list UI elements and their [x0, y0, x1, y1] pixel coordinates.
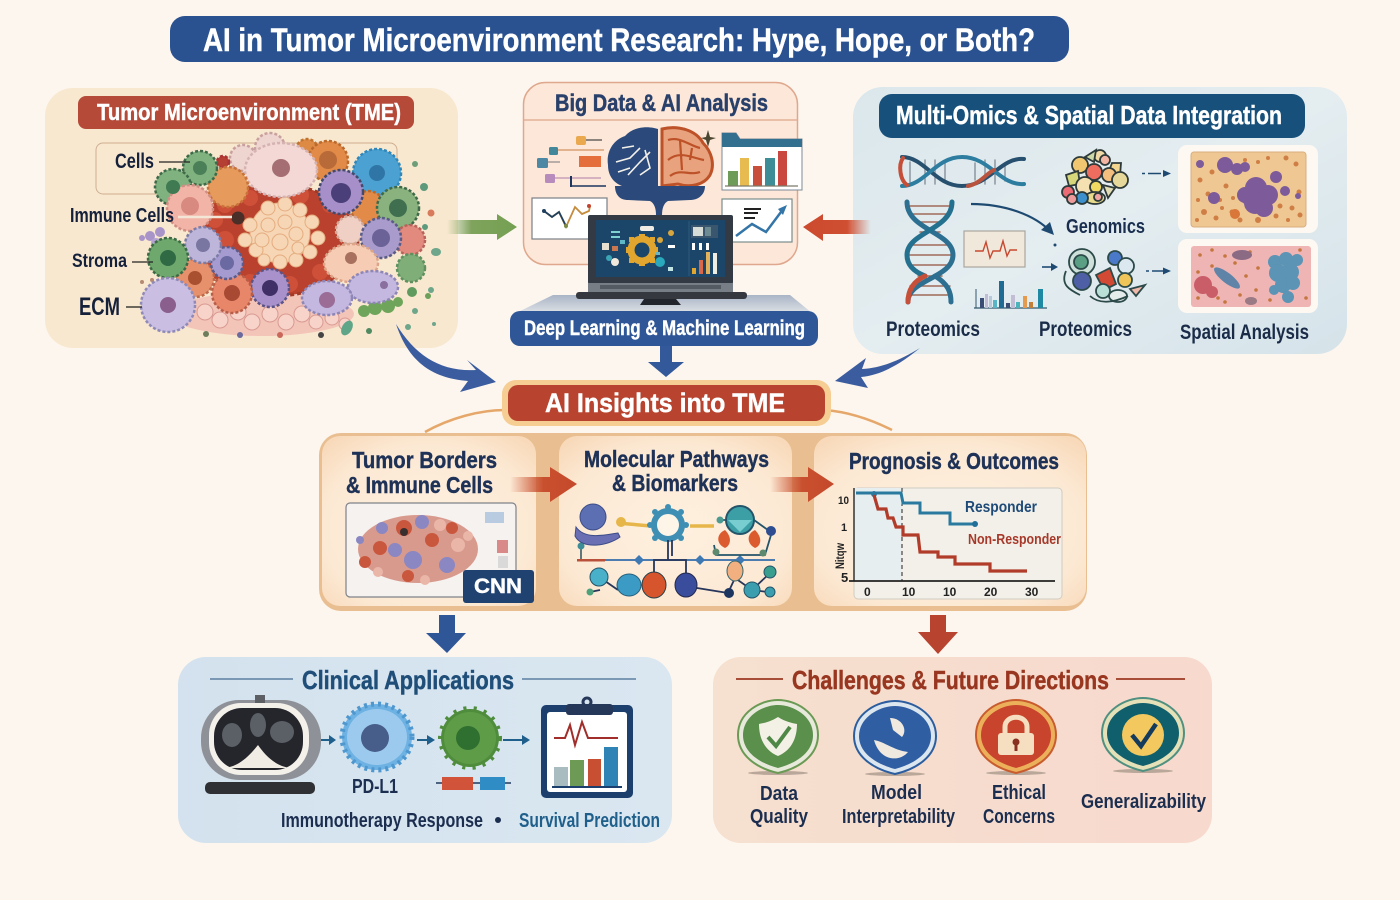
label: data quality	[750, 783, 809, 828]
panel heading: multi-omics: Multi-Omics & Spatial Data Integration	[896, 100, 1282, 130]
arrow: tile two to three	[770, 467, 834, 502]
bar: deep learning	[510, 311, 818, 346]
dark marker	[232, 212, 244, 224]
heading: tumor borders: & Immune Cells	[346, 472, 493, 498]
panel: big data and AI analysis	[524, 82, 802, 264]
label: proteomics middle: Proteomics	[1039, 318, 1132, 341]
label: non-responder: Non-Responder	[968, 531, 1061, 548]
arrow: TME to big data	[447, 214, 517, 240]
label: Cells: Cells	[115, 150, 154, 173]
small arrow	[1042, 263, 1058, 271]
arrow	[503, 735, 530, 745]
label: generalizability: Generalizability	[1081, 791, 1207, 813]
badge: CNN: CNN	[474, 575, 522, 598]
chart: survival curve	[833, 488, 1062, 599]
badge: CNN	[463, 570, 534, 603]
red tumor mass	[192, 184, 358, 296]
line chart right	[722, 199, 792, 242]
icon: ethics shield	[976, 700, 1056, 775]
chart: survival curve: 20	[984, 585, 998, 599]
panel: insights row	[319, 433, 1087, 611]
panel heading: multi-omics	[879, 94, 1305, 138]
tile: prognosis	[814, 436, 1086, 606]
chart: survival curve: 1	[841, 522, 847, 534]
icon: horizontal DNA	[900, 157, 1024, 186]
sparkle	[701, 130, 716, 147]
text: survival prediction: Survival Prediction	[519, 810, 660, 832]
cell cluster: genomics	[1062, 150, 1128, 204]
icon: laptop	[576, 215, 747, 305]
label: ethical concerns: Ethical	[992, 782, 1046, 804]
panel: AI insights heading	[502, 380, 831, 426]
bullet	[495, 817, 501, 823]
label: ethical concerns: Concerns	[983, 806, 1055, 828]
icon: vertical DNA	[907, 202, 953, 302]
arcs	[425, 410, 892, 432]
panel: AI insights heading: AI Insights into TME	[545, 388, 785, 418]
label: ECM: ECM	[79, 293, 120, 321]
label box	[96, 143, 397, 194]
label: data quality: Data	[760, 783, 799, 805]
icon: brain	[608, 127, 712, 215]
cream tumor core	[238, 197, 325, 269]
icon: drug blocks	[436, 777, 511, 790]
chart: survival curve: 10	[943, 585, 957, 599]
heading: tumor borders	[346, 447, 497, 498]
icon: generalizability shield	[1102, 698, 1184, 773]
arrow: tile one to two	[510, 467, 577, 502]
label: ethical concerns	[983, 782, 1055, 828]
icon: green immune cell	[441, 709, 499, 767]
dashed arrow one	[1142, 170, 1171, 177]
cells ring	[141, 133, 425, 332]
arrow: to clinical	[426, 615, 466, 653]
heading: tumor borders: Tumor Borders	[352, 447, 497, 473]
icon: interpretability shield	[854, 701, 936, 776]
flow diagram icon	[537, 136, 606, 187]
label: Stroma: Stroma	[72, 251, 127, 272]
panel: multi-omics	[853, 87, 1347, 354]
chart: survival curve: Nitqw	[833, 542, 847, 569]
text: immunotherapy response: Immunotherapy Response	[281, 810, 483, 832]
gear	[631, 239, 653, 261]
heading: prognosis: Prognosis & Outcomes	[849, 448, 1059, 474]
bar chart folder	[722, 133, 802, 190]
icon: clipboard	[541, 698, 633, 798]
heading: molecular pathways	[584, 446, 769, 496]
arrow	[321, 735, 336, 745]
icon: CT scanner	[201, 695, 321, 794]
panel: challenges	[713, 657, 1212, 843]
bar: deep learning: Deep Learning & Machine Learning	[524, 317, 805, 340]
tissue screenshot	[346, 503, 516, 597]
title	[170, 16, 1069, 62]
tile: tumor borders	[322, 436, 536, 606]
heading: molecular pathways: Molecular Pathways	[584, 446, 769, 472]
label: model interpretability: Interpretability	[842, 806, 956, 828]
label: model interpretability: Model	[871, 782, 922, 804]
label: Cells	[115, 150, 190, 173]
arrow: to challenges	[918, 615, 958, 654]
arrow: omics curved	[835, 348, 920, 388]
curved arrow	[971, 204, 1054, 235]
dashed arrow two	[1146, 268, 1171, 274]
panel heading: TME: Tumor Microenvironment (TME)	[97, 99, 401, 125]
pathway network	[575, 504, 776, 598]
monitor ECG icon	[964, 231, 1025, 267]
arrow: deep learning down	[648, 346, 684, 377]
panel: tumor microenvironment	[45, 88, 458, 348]
chart: survival curve: 0	[864, 585, 871, 599]
label: Immune Cells: Immune Cells	[70, 205, 174, 227]
cell cluster: proteomics	[1064, 249, 1145, 302]
tumor cell illustration	[139, 133, 441, 338]
heading: molecular pathways: & Biomarkers	[612, 470, 738, 496]
panel: clinical applications	[178, 657, 672, 843]
tile: molecular pathways	[559, 436, 792, 606]
heading: big data: Big Data & AI Analysis	[555, 90, 768, 117]
arrow: omics to big data	[803, 214, 871, 241]
label: responder: Responder	[965, 499, 1037, 516]
label: genomics: Genomics	[1066, 216, 1145, 238]
chart: survival curve: 5	[841, 570, 848, 585]
tissue image one	[1178, 145, 1318, 233]
icon: data quality shield	[738, 700, 818, 775]
label: model interpretability	[842, 782, 956, 828]
platform under laptop	[516, 295, 812, 313]
arrow	[417, 735, 435, 745]
label: data quality: Quality	[750, 806, 809, 828]
speckles	[139, 161, 441, 338]
heading: challenges: Challenges & Future Directions	[792, 665, 1109, 695]
line chart left	[532, 198, 607, 239]
tissue image two	[1178, 239, 1318, 313]
heading: clinical applications: Clinical Applications	[302, 665, 514, 695]
label: spatial analysis: Spatial Analysis	[1180, 321, 1309, 344]
label: PD-L1: PD-L1	[352, 776, 398, 798]
chart: survival curve: 30	[1025, 585, 1039, 599]
chart: survival curve: 10	[902, 585, 916, 599]
arrow: TME curved	[396, 324, 496, 392]
panel heading: TME	[78, 96, 414, 129]
chart: survival curve: 10	[838, 495, 849, 507]
title: AI in Tumor Microenvironment Research: Hype, Hope, or Both?	[203, 22, 1035, 58]
icon: PD-L1 cell	[342, 704, 412, 770]
small bar chart	[974, 281, 1047, 308]
label: proteomics left: Proteomics	[886, 318, 980, 341]
